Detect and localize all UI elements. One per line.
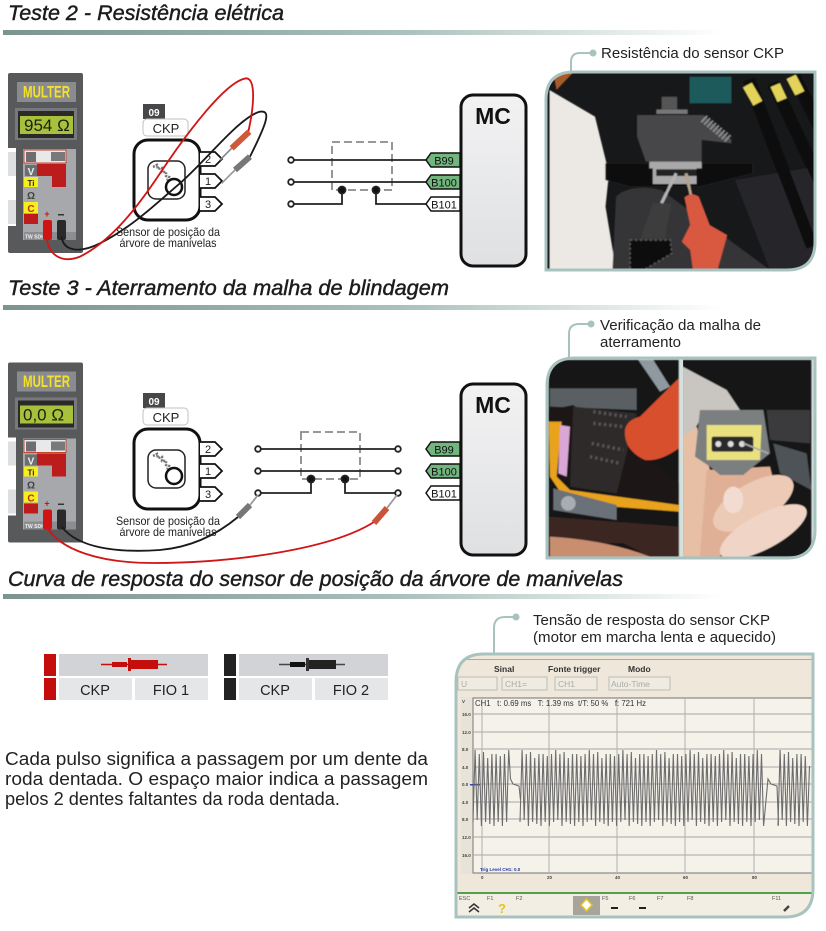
scope controls: Modo [628, 664, 651, 674]
test leads, test 2 [47, 78, 266, 259]
sensor CKP, test 3: CKP [153, 410, 179, 425]
sensor CKP, test 2: 1 [205, 176, 211, 188]
title: Teste 3: Teste 3 - Aterramento da malha de blindagem [8, 277, 449, 300]
multimeter: 0,0 ohm: 0,0 Ω [23, 406, 64, 424]
sensor CKP, test 3: 2 [205, 444, 211, 456]
oscilloscope screenshot [456, 654, 814, 918]
scope plot: 80 [752, 875, 758, 880]
scope plot: 4.0 [462, 765, 469, 770]
text block: pulse explanation: pelos 2 dentes faltantes da roda dentada. [5, 789, 340, 809]
multimeter: 954 ohm: TW SDH [25, 234, 45, 240]
scope controls: Sinal [494, 664, 514, 674]
scope toolbar [458, 892, 812, 916]
scope plot: 16.0 [462, 712, 471, 717]
sensor CKP, test 2: 09 [148, 108, 160, 119]
sensor CKP, test 3: 09 [148, 397, 160, 408]
photo: probes on CKP connector [546, 72, 826, 270]
scope plot: 0 [481, 875, 484, 880]
scope toolbar: F5 [602, 896, 608, 902]
scope toolbar: ? [498, 901, 506, 916]
circuit, test 2 [288, 142, 428, 207]
multimeter: 954 ohm: 954 Ω [24, 116, 70, 135]
multimeter: 954 ohm: C [27, 204, 35, 215]
scope plot: 4.0 [462, 800, 469, 805]
multimeter: 0,0 ohm: TW SDH [25, 524, 45, 530]
title: Curva de resposta: Curva de resposta do sensor de posição da árvore de manivelas [8, 568, 623, 591]
title: Teste 2: Teste 2 - Resistência elétrica [8, 2, 284, 25]
photos: ground mesh check [547, 358, 815, 570]
text block: pulse explanation: roda dentada. O espaço maior indica a passagem [5, 769, 428, 789]
multimeter: 0,0 ohm [8, 362, 83, 542]
multimeter: 954 ohm: Ti [28, 179, 34, 188]
multimeter: 954 ohm: V [28, 167, 35, 178]
scope plot: V [462, 699, 465, 704]
sensor CKP, test 2: 2 [205, 154, 211, 166]
connector tags and MC module, test 2: MC [475, 103, 511, 129]
legend: CKP to wire 2: CKP [260, 683, 290, 699]
multimeter: 954 ohm [8, 73, 83, 253]
photo: connector held in hand [683, 360, 814, 570]
callout: Tensão de resposta [494, 612, 776, 654]
legend: CKP to wire 1 [44, 654, 208, 700]
multimeter: 0,0 ohm: MULTER [23, 372, 70, 391]
multimeter: 0,0 ohm: Ti [28, 468, 34, 478]
callout: Tensão de resposta: Tensão de resposta do sensor CKP [533, 612, 770, 629]
circuit, test 3 [255, 432, 401, 496]
scope toolbar: F7 [657, 896, 663, 902]
scope plot: 12.0 [462, 835, 471, 840]
photo: red probe on connector [549, 360, 679, 557]
scope controls: Auto-Time [611, 679, 650, 689]
callout: Verificação da malha de aterramento: Verificação da malha de [600, 317, 761, 334]
sensor CKP, test 3 [116, 393, 222, 539]
scope controls: Fonte trigger [548, 664, 601, 674]
scope plot [461, 697, 813, 880]
scope plot: 20 [547, 875, 553, 880]
callout: Resistência do sensor CKP: Resistência do sensor CKP [601, 45, 784, 62]
connector tags and MC module, test 3: MC [475, 392, 511, 418]
scope plot: 8.0 [462, 747, 469, 752]
waveform [473, 750, 809, 826]
multimeter: 0,0 ohm: C [27, 494, 35, 504]
sensor CKP, test 2: Sensor de posição da [116, 225, 220, 239]
multimeter: 0,0 ohm: + [44, 498, 50, 508]
connector tags and MC module, test 3: B99 [434, 444, 454, 456]
legend: CKP to wire 2 [224, 654, 388, 700]
scope plot: 0.0 [462, 782, 469, 787]
connector tags and MC module, test 2 [426, 95, 526, 266]
multimeter: 954 ohm: Ω [27, 191, 35, 202]
sensor CKP, test 3: 3 [205, 489, 211, 501]
text block: pulse explanation [5, 749, 429, 809]
connector tags and MC module, test 2: B100 [431, 178, 457, 190]
scope toolbar: ESC [459, 896, 470, 902]
callout: Verificação da malha de aterramento: aterramento [600, 334, 681, 351]
multimeter: 954 ohm: MULTER [23, 82, 70, 102]
sensor CKP, test 3: 1 [205, 466, 211, 478]
scope plot: CH1 t: 0.69 ms T: 1.39 ms t/T: 50 % f: 721 Hz [475, 699, 646, 708]
legend: CKP to wire 2: FIO 2 [333, 683, 369, 699]
scope plot: 60 [683, 875, 689, 880]
connector tags and MC module, test 3: B101 [431, 488, 457, 500]
multimeter: 0,0 ohm: Ω [27, 480, 35, 492]
sensor CKP, test 2: árvore de manivelas [120, 236, 216, 250]
scope controls: CH1= [505, 679, 527, 689]
scope plot: Trig Level CH1: 0.0 [480, 867, 521, 872]
legend: CKP to wire 1: CKP [80, 683, 110, 699]
legend: CKP to wire 1: FIO 1 [153, 683, 189, 699]
connector tags and MC module, test 2: B99 [434, 156, 454, 168]
sensor CKP, test 3: Sensor de posição da [116, 514, 220, 528]
callout: Verificação da malha de aterramento [569, 317, 761, 358]
scope toolbar: F8 [687, 896, 693, 902]
callout: Resistência do sensor CKP [571, 45, 784, 72]
scope plot: 40 [615, 875, 621, 880]
test leads, test 3 [47, 495, 397, 563]
connector tags and MC module, test 2: B101 [431, 200, 457, 212]
text block: pulse explanation: Cada pulso significa a passagem por um dente da [5, 749, 429, 769]
sensor CKP, test 2: 3 [205, 199, 211, 211]
connector tags and MC module, test 3 [426, 384, 526, 555]
sensor CKP, test 3: árvore de manivelas [120, 525, 216, 539]
scope toolbar: F6 [629, 896, 635, 902]
scope toolbar: F11 [772, 896, 781, 902]
scope plot: 12.0 [462, 730, 471, 735]
callout: Tensão de resposta: (motor em marcha lenta e aquecido) [533, 629, 776, 646]
scope controls [458, 664, 670, 690]
multimeter: 0,0 ohm: V [28, 456, 35, 468]
scope controls: U [461, 679, 467, 689]
scope toolbar: F1 [487, 896, 493, 902]
scope plot: 16.0 [462, 853, 471, 858]
connector tags and MC module, test 3: B100 [431, 466, 457, 478]
sensor CKP, test 2 [116, 104, 222, 250]
scope toolbar: F2 [516, 896, 522, 902]
multimeter: 954 ohm: + [44, 209, 50, 219]
scope controls: CH1 [558, 679, 575, 689]
scope plot: 8.0 [462, 817, 469, 822]
sensor CKP, test 2: CKP [153, 121, 179, 136]
